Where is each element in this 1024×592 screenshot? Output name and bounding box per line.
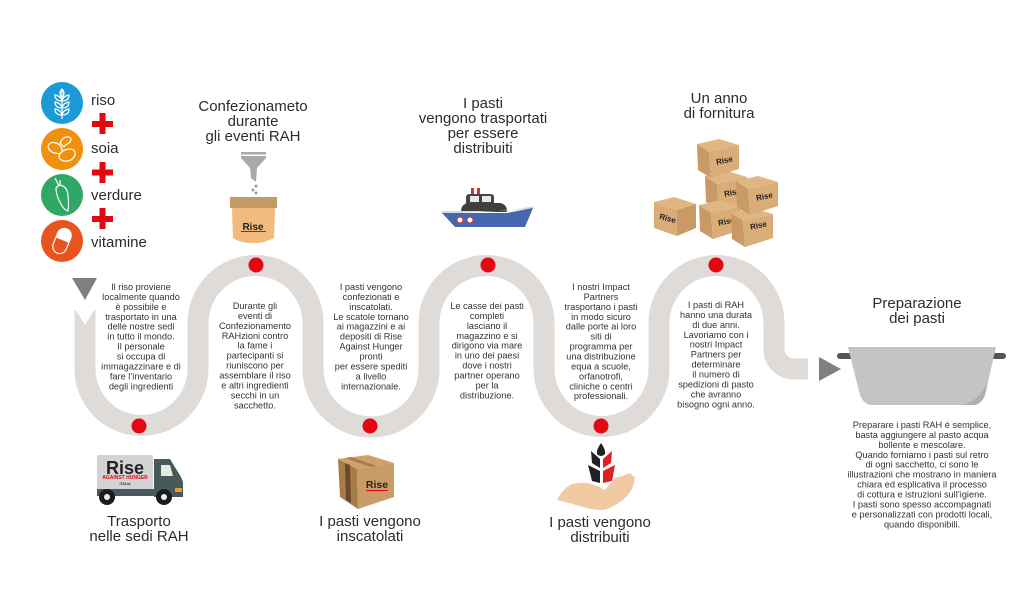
red milestone dots: [132, 258, 724, 434]
text: shipping: dove i nostri: [462, 361, 512, 371]
text: preparation: quando disponibili.: [884, 519, 960, 529]
heading: year of supply: di fornitura: [684, 105, 755, 122]
ingredient labels: soia: [91, 140, 119, 157]
text: boxing: per essere spediti: [335, 361, 407, 371]
text: preparation: I pasti sono spesso accompagnati: [853, 499, 991, 509]
icon: stacked cartons: Rise: [755, 190, 774, 203]
text: shipping: lasciano il: [467, 321, 507, 331]
text: packaging events: la fame i: [238, 341, 272, 351]
icon: stacked cartons: Rise: [658, 212, 678, 225]
ingredient labels: [91, 92, 147, 251]
heading: boxed: I pasti vengono: [319, 513, 421, 530]
winding road path: [74, 266, 808, 427]
text: shelf life: che avranno: [691, 389, 741, 399]
text: distribution: in modo sicuro: [571, 312, 631, 322]
icon: stacked cartons: Rise: [723, 186, 742, 199]
icon: sealed box: [338, 455, 394, 509]
text: packaging events: partecipanti si: [227, 351, 283, 361]
heading: distributed: distribuiti: [570, 529, 630, 546]
text: shelf life: nostri Impact: [690, 340, 743, 350]
text: packaging events: Durante gli: [233, 301, 277, 311]
text: rice sourcing: localmente quando: [102, 292, 180, 302]
text: shelf life: spedizioni di pasto: [678, 379, 754, 389]
text: shipping: per la: [476, 380, 499, 390]
text: packaging events: e altri ingredienti: [221, 380, 289, 390]
plus signs: [92, 113, 113, 229]
text: shipping: Le casse dei pasti: [450, 301, 524, 311]
icon: stacked cartons: [654, 139, 778, 247]
icon: sealed box: Rise: [366, 479, 388, 491]
icon: carrot: [41, 174, 83, 216]
text: shipping: magazzino e si: [456, 331, 518, 341]
icon: stacked cartons: Rise: [749, 219, 768, 232]
heading: meal preparation: dei pasti: [889, 310, 945, 327]
text: distribution: Partners: [584, 292, 619, 302]
start arrow: [72, 278, 97, 300]
text: distribution: equa a scuole,: [571, 361, 631, 371]
heading: distributed: I pasti vengono: [549, 514, 651, 531]
icon: truck: AGAINST HUNGER: [102, 475, 148, 481]
ingredients legend: [41, 82, 147, 262]
icon: ship: [442, 188, 534, 227]
text: preparation: Quando forniamo i pasti sul retro: [855, 450, 989, 460]
heading: transported: I pasti: [463, 95, 503, 112]
icon: truck: [97, 455, 183, 505]
text: distribution: cliniche o centri: [569, 381, 633, 391]
text: packaging events: secchi in un: [231, 390, 279, 400]
icon: funnel and bag: Rise: [242, 222, 264, 233]
text: shelf life: Partners per: [691, 350, 741, 360]
icon: vitamin capsule: [41, 220, 83, 262]
text: rice sourcing: Il riso proviene: [111, 282, 171, 292]
text: boxing: a livello: [356, 371, 386, 381]
icon: rice: [41, 82, 83, 124]
ingredient labels: riso: [91, 92, 115, 109]
text: boxing: confezionati e: [343, 292, 399, 302]
text: packaging events: assemblare il riso: [219, 371, 291, 381]
heading: transported: distribuiti: [453, 140, 513, 157]
text: boxing: Le scatole tornano: [333, 312, 409, 322]
heading: transport: nelle sedi RAH: [89, 528, 189, 545]
icon: stacked cartons: Rise: [717, 215, 736, 228]
text: rice sourcing: degli ingredienti: [109, 381, 173, 391]
text: distribution: programma per: [570, 342, 632, 352]
text: shipping: partner operano: [454, 371, 520, 381]
text: boxing: inscatolati.: [349, 302, 393, 312]
text: preparation: di cottura e istruzioni sull’igiene.: [857, 490, 987, 500]
text: preparation: di ogni sacchetto, ci sono le: [866, 460, 978, 470]
text: shipping: completi: [470, 311, 504, 321]
text: packaging events: sacchetto.: [234, 400, 276, 410]
heading: transport: Trasporto: [107, 513, 171, 530]
text: distribution: siti di: [591, 332, 611, 342]
heading: packaging events: Confezionameto: [198, 98, 308, 115]
heading: packaging events: durante: [228, 113, 278, 130]
text: boxing: ai magazzini e ai: [337, 322, 405, 332]
ingredient labels: vitamine: [91, 234, 147, 251]
text: boxing: internazionale.: [341, 381, 401, 391]
text: preparation: bollente e mescolare.: [878, 440, 966, 450]
text: distribution: trasportano i pasti: [564, 302, 638, 312]
text: preparation: Preparare i pasti RAH è semplice,: [853, 420, 991, 430]
icon: truck: Rise: [106, 458, 144, 478]
heading: boxed: inscatolati: [337, 528, 403, 545]
text: rice sourcing: in tutto il mondo.: [107, 332, 175, 342]
text: shipping: dirigono via mare: [452, 341, 522, 351]
text: boxing: pronti: [360, 352, 382, 362]
icon: hand with wheat: [557, 443, 635, 510]
icon: soy: [41, 128, 83, 170]
heading: transported: per essere: [448, 125, 518, 142]
text: preparation: illustrazioni che mostrano in maniera: [847, 470, 997, 480]
text: rice sourcing: delle nostre sedi: [108, 322, 174, 332]
text: boxing: Against Hunger: [339, 342, 403, 352]
text: rice sourcing: trasportato in una: [105, 312, 178, 322]
ingredient labels: verdure: [91, 187, 142, 204]
heading: packaging events: gli eventi RAH: [205, 128, 301, 145]
text: shelf life: determinare: [691, 360, 741, 370]
heading: year of supply: Un anno: [691, 90, 747, 107]
text: shelf life: hanno una durata: [680, 310, 753, 320]
text: packaging events: Confezionamento: [219, 321, 291, 331]
text: rice sourcing: si occupa di: [117, 352, 165, 362]
text: shipping: distribuzione.: [460, 390, 514, 400]
text: distribution: orfanotrofi,: [579, 371, 623, 381]
text: rice sourcing: fare l’inventario: [110, 371, 172, 381]
icon: pot: [837, 347, 1006, 405]
text: packaging events: riuniscono per: [226, 361, 284, 371]
text: shelf life: il numero di: [692, 370, 740, 380]
text: distribution: una distribuzione: [566, 352, 636, 362]
end arrow: [819, 357, 841, 381]
text: distribution: I nostri Impact: [572, 282, 630, 292]
text: shelf life: Lavoriamo con i: [684, 330, 748, 340]
text: shelf life: I pasti di RAH: [688, 300, 744, 310]
icon: stacked cartons: Rise: [715, 154, 734, 167]
text: boxing: I pasti vengono: [340, 282, 402, 292]
icon: truck: ITALIA: [119, 482, 131, 486]
text: boxing: depositi di Rise: [340, 332, 402, 342]
text: rice sourcing: Il personale: [117, 342, 165, 352]
text: preparation: e personalizzati con prodotti locali,: [852, 509, 992, 519]
text: rice sourcing: immagazzinare e di: [101, 361, 181, 371]
text: distribution: professionali.: [574, 391, 628, 401]
icon: funnel and bag: [230, 152, 277, 243]
text: rice sourcing: è possibile e: [115, 302, 167, 312]
text: preparation: chiara ed esplicativa il processo: [857, 480, 987, 490]
heading: meal preparation: Preparazione: [872, 295, 962, 312]
text: shelf life: di due anni.: [692, 320, 740, 330]
text: shelf life: bisogno ogni anno.: [677, 399, 755, 409]
text: distribution: dalle porte ai loro: [566, 322, 636, 332]
text: preparation: basta aggiungere al pasto acqua: [855, 430, 990, 440]
text: packaging events: RAHzioni contro: [222, 331, 288, 341]
text: packaging events: eventi di: [238, 311, 272, 321]
heading: transported: vengono trasportati: [419, 110, 547, 127]
text: shipping: in uno dei paesi: [455, 351, 519, 361]
